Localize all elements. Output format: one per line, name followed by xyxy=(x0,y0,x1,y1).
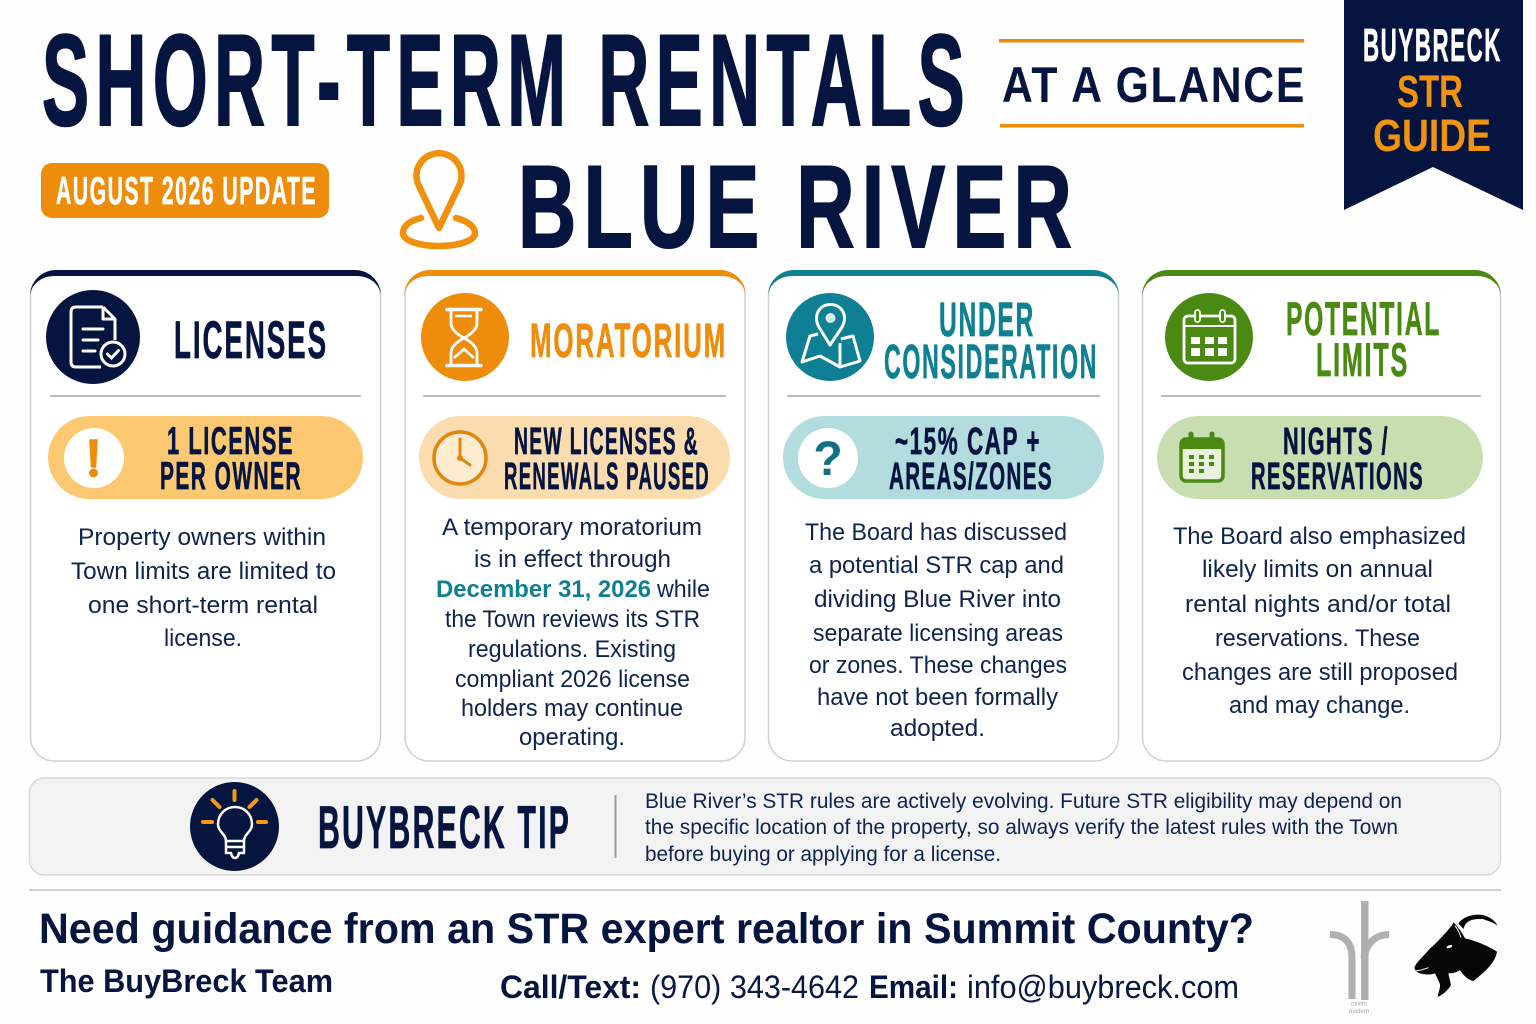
badge: August 2026 update xyxy=(41,163,329,218)
subtitle: At a Glance xyxy=(999,39,1306,128)
contact details: Call/Text: xyxy=(500,969,641,1005)
text: potential limits description: and may change. xyxy=(1229,692,1410,719)
text: moratorium description: holders may continue xyxy=(461,695,683,722)
panel: BuyBreck tip xyxy=(30,778,1500,875)
panel heading: Licenses: LICENSES xyxy=(174,311,328,370)
text: tip message xyxy=(645,790,1402,866)
text: under consideration description: dividing Blue River into xyxy=(814,586,1061,613)
text: moratorium description: the Town reviews its STR xyxy=(445,606,700,633)
text: licenses description xyxy=(71,524,336,652)
call to action headline: Need guidance from an STR expert realtor in Summit County? xyxy=(39,905,1254,953)
text: moratorium description: operating. xyxy=(519,724,625,751)
panel: under consideration xyxy=(768,270,1119,761)
text: moratorium description: is in effect through xyxy=(474,546,671,573)
contact details: Email: xyxy=(869,969,958,1005)
text: potential limits description: likely limits on annual xyxy=(1202,556,1433,583)
text: moratorium description: regulations. Existing xyxy=(468,636,676,663)
pill: new licenses and renewals paused: RENEWALS PAUSED xyxy=(504,456,710,498)
panel heading: Potential Limits xyxy=(1286,292,1441,386)
pill: 1 license per owner xyxy=(48,416,363,499)
text: under consideration description: a potential STR cap and xyxy=(809,552,1064,579)
icon: map with pin xyxy=(786,293,874,381)
panel heading: Potential Limits: LIMITS xyxy=(1316,333,1409,386)
pill: nights and reservations xyxy=(1157,416,1483,499)
text: tip message: Blue River’s STR rules are actively evolving. Future STR eligibility may depend on xyxy=(645,790,1402,813)
panel heading: Under Consideration: UNDER xyxy=(939,294,1035,347)
text: under consideration description: adopted. xyxy=(890,715,985,742)
icon: location pin xyxy=(403,153,475,246)
pill: 15 percent cap and areas or zones: ? xyxy=(813,433,843,486)
text: moratorium description: compliant 2026 license xyxy=(455,666,690,693)
text: licenses description: license. xyxy=(164,625,242,652)
panel: moratorium xyxy=(404,270,746,761)
text: under consideration description: The Board has discussed xyxy=(805,519,1067,546)
panel heading: Under Consideration xyxy=(884,294,1098,389)
logo: goat head xyxy=(1414,915,1498,997)
pill: 15 percent cap and areas or zones: AREAS/ZONES xyxy=(889,456,1053,498)
text: moratorium description: December 31, 2026 xyxy=(436,576,651,603)
text: under consideration description xyxy=(805,519,1067,742)
text: under consideration description: or zones. These changes xyxy=(809,652,1067,679)
icon: light bulb xyxy=(190,782,279,871)
pill: new licenses and renewals paused: NEW LICENSES & xyxy=(514,421,699,463)
text: potential limits description: changes are still proposed xyxy=(1182,659,1458,686)
pill: nights and reservations: NIGHTS / xyxy=(1283,421,1389,463)
logo: milehi modern: milehi xyxy=(1351,1002,1367,1008)
pill: 15 percent cap and areas or zones xyxy=(783,416,1104,499)
logo: milehi modern: modern xyxy=(1349,1009,1369,1015)
text: tip message: the specific location of the property, so always verify the latest rules with the Town xyxy=(645,816,1398,839)
ribbon: BuyBreck STR Guide xyxy=(1344,0,1523,210)
icon: hourglass xyxy=(421,293,509,381)
heading: Blue River: BLUE RIVER xyxy=(518,141,1079,272)
team name: The BuyBreck Team xyxy=(40,963,333,999)
panel heading: Moratorium: MORATORIUM xyxy=(530,315,727,368)
icon: license document xyxy=(46,290,140,384)
logo: milehi modern xyxy=(1330,901,1389,1015)
subtitle: At a Glance: AT A GLANCE xyxy=(1002,57,1306,113)
pill: new licenses and renewals paused xyxy=(419,416,730,499)
text: under consideration description: have not been formally xyxy=(817,684,1058,711)
text: potential limits description: The Board also emphasized xyxy=(1173,523,1466,550)
text: potential limits description: rental nights and/or total xyxy=(1185,591,1451,618)
text: licenses description: Property owners within xyxy=(78,524,326,551)
contact details: (970) 343-4642 xyxy=(650,969,859,1005)
text: potential limits description: reservations. These xyxy=(1215,625,1420,652)
text: tip message: before buying or applying for a license. xyxy=(645,843,1001,866)
contact details: info@buybreck.com xyxy=(967,969,1239,1005)
pill: 1 license per owner: 1 LICENSE xyxy=(167,420,294,463)
text: moratorium description: A temporary moratorium xyxy=(442,514,702,541)
badge: August 2026 update: AUGUST 2026 UPDATE xyxy=(56,170,317,213)
panel: potential limits xyxy=(1142,270,1501,761)
text: licenses description: one short-term rental xyxy=(88,592,318,619)
text: moratorium description xyxy=(436,514,710,751)
contact details xyxy=(500,969,1239,1005)
text: moratorium description: while xyxy=(656,576,710,603)
text: under consideration description: separate licensing areas xyxy=(813,620,1063,647)
panel: licenses xyxy=(30,270,381,761)
pill: 15 percent cap and areas or zones: ~15% CAP + xyxy=(895,421,1041,463)
heading: BuyBreck Tip: BUYBRECK TIP xyxy=(318,794,571,861)
ribbon: BuyBreck STR Guide: STR xyxy=(1397,66,1463,117)
ribbon: BuyBreck STR Guide: GUIDE xyxy=(1373,110,1491,161)
panel: under consideration: CONSIDERATION xyxy=(884,336,1098,389)
icon: calendar in circle xyxy=(1165,293,1253,381)
pill: 1 license per owner: PER OWNER xyxy=(160,455,302,498)
text: licenses description: Town limits are limited to xyxy=(71,558,336,585)
text: potential limits description xyxy=(1173,523,1466,719)
